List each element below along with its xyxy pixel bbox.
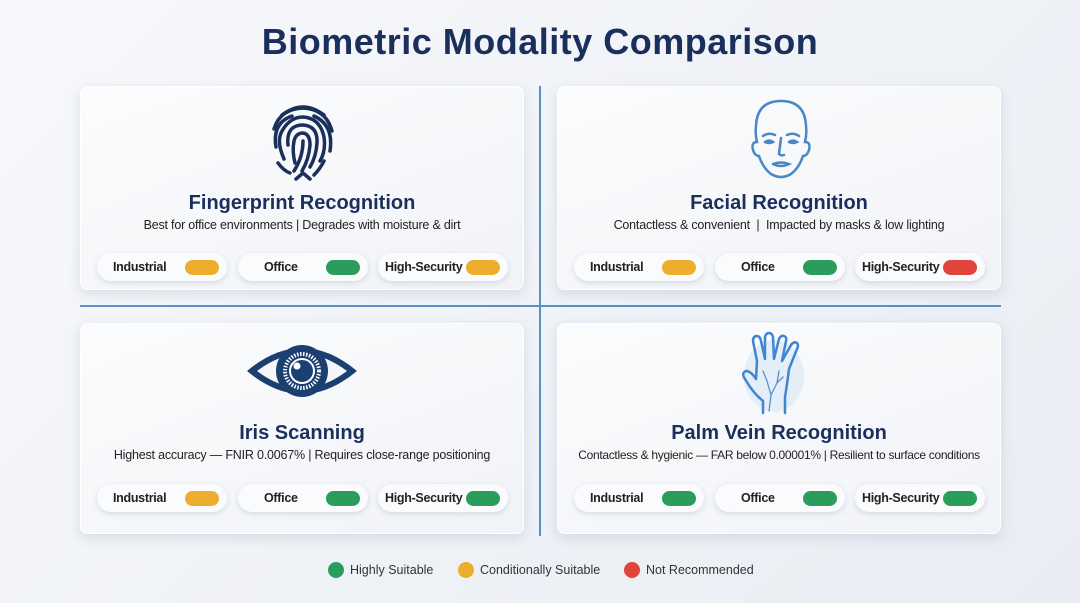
pill: industrial <box>97 484 227 512</box>
heading: Facial Recognition <box>690 192 868 214</box>
pill: office: Office <box>264 260 298 274</box>
heading: Iris Scanning <box>239 422 365 444</box>
panel: palm vein <box>557 323 1001 534</box>
pill: industrial: Industrial <box>113 491 166 505</box>
legend: highly suitable <box>328 562 433 578</box>
pill: high-security: High-Security <box>862 491 939 505</box>
pill: high-security <box>855 484 985 512</box>
panel: fingerprint <box>80 86 524 290</box>
panel: iris <box>80 323 524 534</box>
pill: industrial <box>574 484 704 512</box>
pill: office <box>715 484 845 512</box>
pill: high-security <box>378 253 508 281</box>
pill: office <box>238 253 368 281</box>
title: Biometric Modality Comparison <box>262 21 818 62</box>
icon: fingerprint <box>272 105 334 181</box>
pill: high-security <box>378 484 508 512</box>
icon: palm <box>742 332 804 414</box>
pill: office <box>238 484 368 512</box>
heading: Palm Vein Recognition <box>671 422 887 444</box>
icon: eye <box>247 345 357 397</box>
pill: high-security: High-Security <box>862 260 939 274</box>
pill: office: Office <box>741 491 775 505</box>
pill: office: Office <box>264 491 298 505</box>
legend <box>328 562 754 578</box>
pill: industrial <box>574 253 704 281</box>
pill: industrial: Industrial <box>590 491 643 505</box>
panel: facial <box>557 86 1001 290</box>
pill: high-security: High-Security <box>385 491 462 505</box>
pill: office: Office <box>741 260 775 274</box>
text: Contactless & hygienic — FAR below 0.00001% | Resilient to surface conditions <box>578 448 980 462</box>
pill: office <box>715 253 845 281</box>
legend: highly suitable: Highly Suitable <box>350 563 433 577</box>
pill: high-security <box>855 253 985 281</box>
text: Highest accuracy — FNIR 0.0067% | Requires close-range positioning <box>114 448 490 462</box>
pill: industrial: Industrial <box>113 260 166 274</box>
icon: face <box>751 100 811 178</box>
pill: industrial <box>97 253 227 281</box>
divider horizontal <box>80 305 1001 307</box>
heading: Fingerprint Recognition <box>189 192 415 214</box>
legend: not recommended: Not Recommended <box>646 563 754 577</box>
pill: high-security: High-Security <box>385 260 462 274</box>
legend: conditionally suitable: Conditionally Suitable <box>480 563 600 577</box>
divider vertical <box>539 86 541 536</box>
pill: industrial: Industrial <box>590 260 643 274</box>
text: Contactless & convenient | Impacted by masks & low lighting <box>614 218 944 232</box>
text: Best for office environments | Degrades with moisture & dirt <box>144 218 460 232</box>
